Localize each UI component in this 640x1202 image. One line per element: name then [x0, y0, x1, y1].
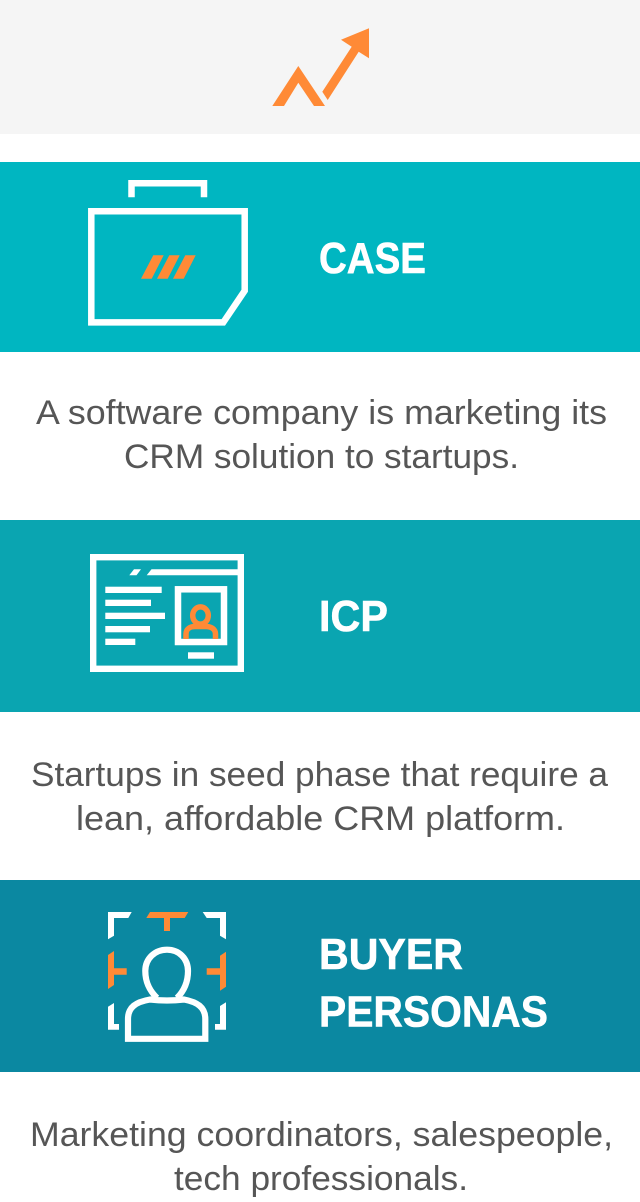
text block: case description: CRM solution to startups.: [124, 438, 519, 476]
heading: case: CASE: [319, 234, 426, 283]
text block: buyer personas description: tech professionals.: [174, 1160, 468, 1198]
heading: icp: ICP: [319, 592, 388, 641]
text block: buyer personas description: [30, 1116, 613, 1198]
text block: case description: A software company is marketing its: [36, 394, 607, 432]
panel: buyer personas: [0, 880, 640, 1072]
icon: person in focus frame: [108, 912, 226, 1039]
text block: icp description: Startups in seed phase that require a: [31, 756, 609, 794]
text block: buyer personas description: Marketing coordinators, salespeople,: [30, 1116, 613, 1154]
panel: case: [0, 162, 640, 352]
icon: profile card: [93, 557, 241, 669]
text block: icp description: [31, 756, 609, 838]
panel: icp: [0, 520, 640, 712]
icon: briefcase: [91, 183, 245, 322]
heading: buyer personas: BUYER: [319, 930, 463, 979]
heading: buyer personas: [319, 930, 548, 1036]
heading: buyer personas: PERSONAS: [319, 987, 548, 1036]
text block: case description: [36, 394, 607, 476]
header panel with growth arrow: [0, 0, 640, 134]
icon: upward arrow: [272, 28, 369, 106]
text block: icp description: lean, affordable CRM platform.: [76, 800, 565, 838]
